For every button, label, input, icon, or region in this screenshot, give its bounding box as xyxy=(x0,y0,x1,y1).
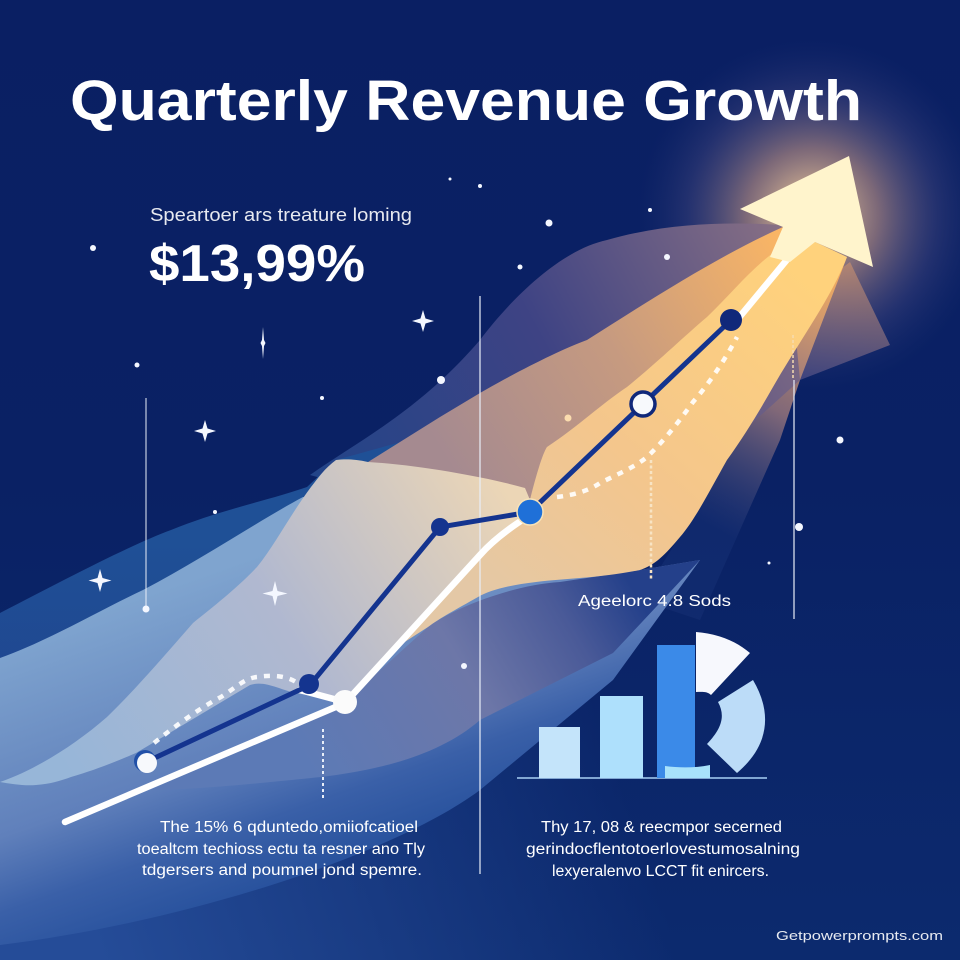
bar chart with pie segments xyxy=(517,632,767,778)
left caption xyxy=(137,819,425,879)
left caption: The 15% 6 qduntedo,omiiofcatioel xyxy=(160,819,418,836)
big percentage stat: $13,99% xyxy=(149,235,365,293)
white rising trend line xyxy=(65,250,795,822)
subtitle: Speartoer ars treature loming xyxy=(150,205,412,225)
stars and sparkles xyxy=(88,178,844,669)
right caption: Thy 17, 08 & reecmpor secerned xyxy=(541,819,782,836)
right caption: lexyeralenvo LCCT fit enircers. xyxy=(552,863,769,880)
left caption: tdgersers and poumnel jond spemre. xyxy=(142,862,422,879)
white dashed trend curve xyxy=(154,337,737,743)
navy revenue line with data points xyxy=(134,309,742,773)
bar and pie label: Ageelorc 4.8 Sods xyxy=(578,593,731,610)
right caption: gerindocflentotoerlovestumosalning xyxy=(526,841,800,858)
right caption xyxy=(526,819,800,880)
watermark: Getpowerprompts.com xyxy=(776,928,943,943)
title: Quarterly Revenue Growth xyxy=(70,69,862,133)
left caption: toealtcm techioss ectu ta resner ano Tly xyxy=(137,841,425,858)
flowing light bands xyxy=(0,224,890,945)
arrowhead xyxy=(740,156,873,267)
thin vertical guide lines xyxy=(146,296,794,874)
